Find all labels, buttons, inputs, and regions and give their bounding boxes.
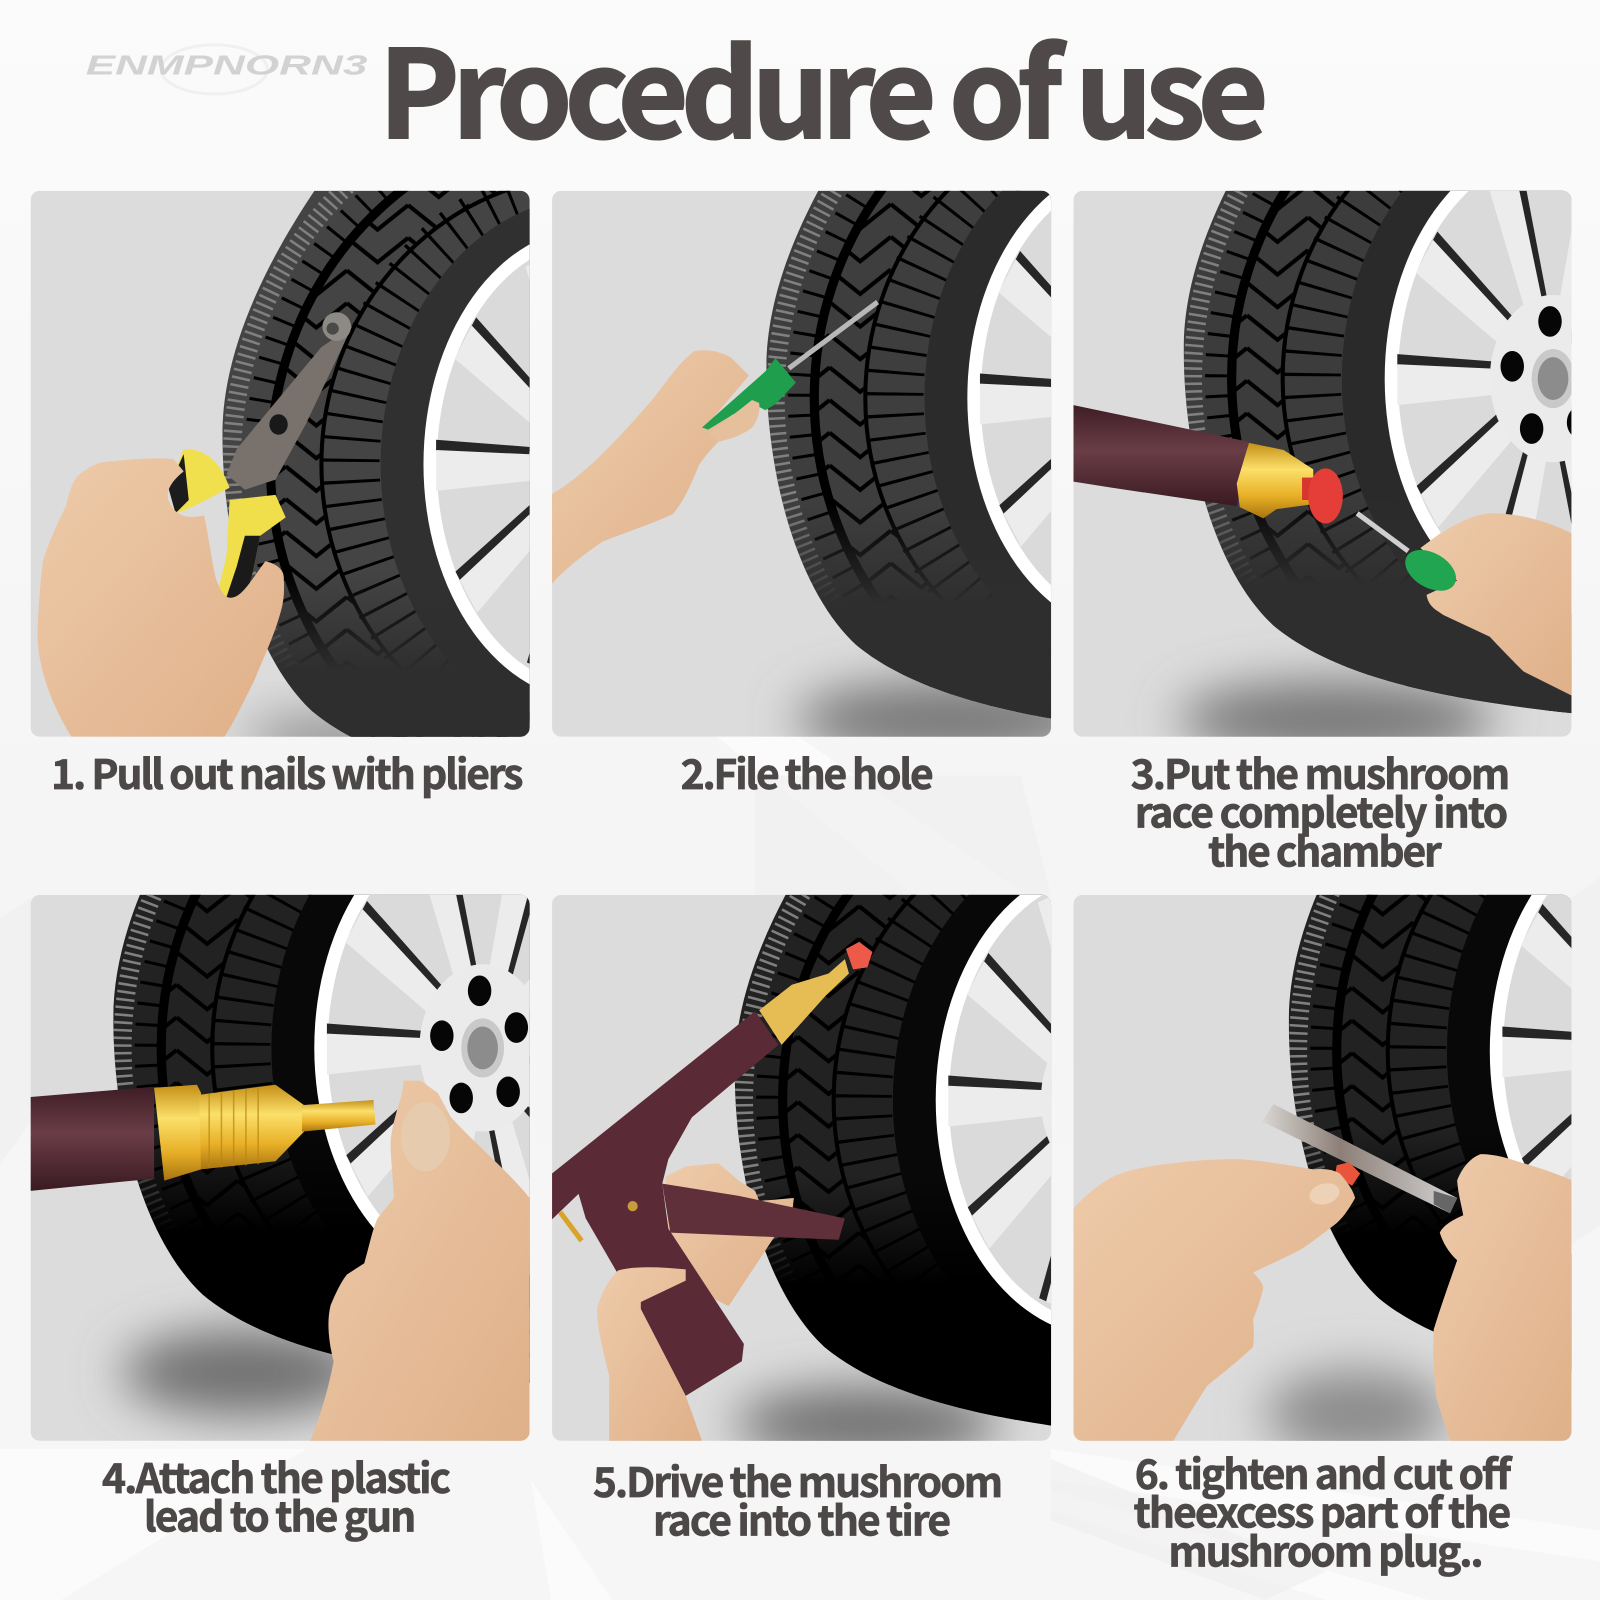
caption 3: the chamber bbox=[1208, 819, 1442, 878]
gun barrel bbox=[1073, 405, 1343, 523]
fingernail bbox=[1310, 1183, 1340, 1204]
caption 4: lead to the gun bbox=[144, 1485, 416, 1544]
title: Procedure of use bbox=[379, 0, 1268, 173]
logo watermark bbox=[86, 45, 368, 94]
file tool bbox=[702, 302, 878, 430]
tire bbox=[113, 894, 530, 1383]
caption 2: 2.File the hole bbox=[681, 742, 934, 801]
caption 6: theexcess part of the bbox=[1134, 1481, 1511, 1540]
tire bbox=[222, 190, 530, 737]
caption 3: race completely into bbox=[1135, 781, 1508, 840]
plug gun bbox=[552, 942, 872, 1396]
pliers bbox=[168, 312, 352, 602]
panel: step 5 drive mushroom bbox=[552, 894, 1052, 1441]
caption 3 bbox=[1131, 742, 1510, 878]
panel: step 2 file bbox=[552, 190, 1052, 737]
left hand bbox=[1073, 1159, 1355, 1441]
caption 6 bbox=[1134, 1442, 1513, 1578]
red plug bbox=[1335, 1162, 1360, 1186]
caption 5: 5.Drive the mushroom bbox=[593, 1450, 1003, 1509]
caption 3: 3.Put the mushroom bbox=[1131, 742, 1510, 801]
hand behind gun bbox=[665, 1163, 794, 1306]
thumb bbox=[718, 400, 760, 442]
caption 6: 6. tighten and cut off bbox=[1135, 1442, 1513, 1501]
tire bbox=[766, 190, 1052, 718]
tire bbox=[1184, 190, 1572, 714]
caption 5: race into the tire bbox=[653, 1489, 951, 1548]
caption 4 bbox=[102, 1446, 451, 1544]
hand holding grip bbox=[597, 1267, 702, 1441]
caption 6: mushroom plug.. bbox=[1168, 1519, 1484, 1578]
hand bbox=[38, 458, 284, 737]
panel: step 3 mushroom into chamber bbox=[1074, 190, 1572, 737]
hand bbox=[552, 350, 759, 584]
tire bbox=[734, 894, 1052, 1426]
panel: step 4 attach lead bbox=[30, 894, 530, 1441]
caption 1: 1. Pull out nails with pliers bbox=[51, 742, 523, 801]
gun barrel with gold nozzle bbox=[31, 1085, 376, 1191]
blade bbox=[1262, 1104, 1457, 1213]
logo watermark: ENMPNORN3 bbox=[86, 49, 368, 80]
panel: step 1 pliers bbox=[30, 190, 530, 737]
file tool bbox=[1356, 511, 1456, 591]
hand bbox=[1420, 513, 1572, 696]
panel: step 6 trim plug bbox=[1074, 894, 1572, 1441]
caption 4: 4.Attach the plastic bbox=[102, 1446, 451, 1505]
tire bbox=[1288, 894, 1572, 1372]
hand bbox=[310, 1081, 530, 1441]
caption 5 bbox=[593, 1450, 1003, 1548]
right hand bbox=[1433, 1154, 1572, 1441]
